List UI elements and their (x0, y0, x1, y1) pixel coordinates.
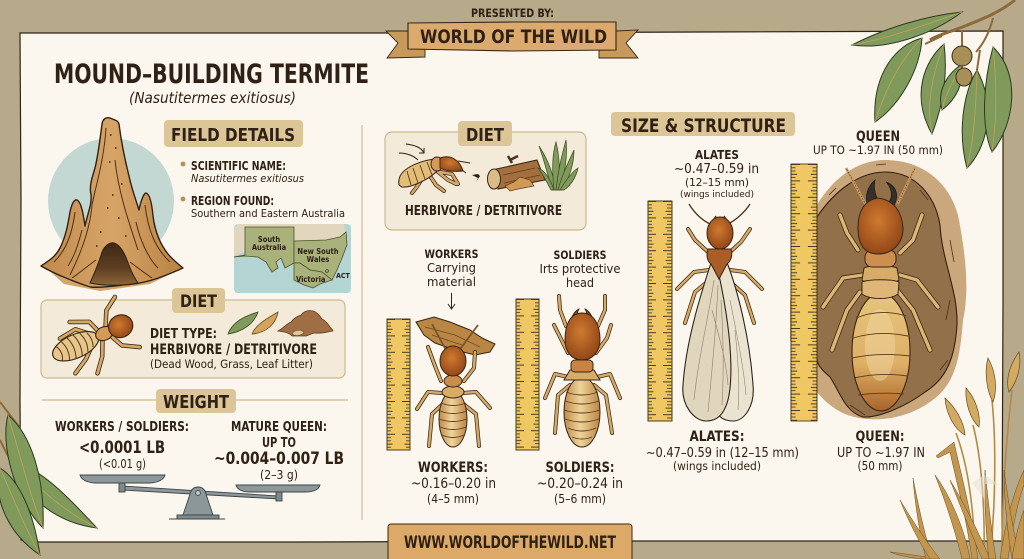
leaf b (14, 462, 97, 528)
grass stems (956, 390, 1012, 559)
illustration: burrow (790, 160, 966, 419)
banner title: WORLD OF THE WILD (420, 26, 607, 48)
illustration: soldier termite (545, 296, 620, 447)
diet heading left (172, 288, 225, 313)
alates size label: ALATES: (690, 429, 744, 445)
field details list: Southern and Eastern Australia (191, 207, 345, 220)
queen size label: (50 mm) (858, 459, 902, 473)
field details list: REGION FOUND: (191, 194, 274, 208)
workers and soldiers weight: (<0.01 g) (99, 457, 146, 471)
map of southeastern australia: New South (297, 247, 339, 256)
queen mandibles (866, 180, 897, 207)
arrow: down to worker (448, 293, 455, 309)
mound cave (90, 243, 138, 285)
map of southeastern australia: South (258, 235, 280, 244)
illustration: worker termite (416, 317, 495, 447)
foliage: grass bottom right (890, 352, 1024, 559)
ruler: soldiers (516, 299, 539, 450)
workers and soldiers weight: <0.0001 LB (79, 438, 165, 458)
weight section (42, 389, 348, 519)
queen top label: QUEEN (856, 129, 900, 145)
icon: green leaf (228, 312, 258, 334)
right wing (718, 260, 753, 421)
ruler: queen (791, 164, 817, 421)
workers size label: ~0.16–0.20 in (411, 476, 496, 492)
soldiers top label: SOLDIERS (554, 248, 606, 262)
header: presented by: PRESENTED BY: (471, 6, 554, 20)
illustration: alate termite (677, 204, 762, 421)
map of southeastern australia: ACT (336, 272, 350, 280)
leaf 3 (921, 44, 945, 134)
subtitle: (Nasutitermes exitiosus) (129, 89, 296, 107)
alates size label: ~0.47–0.59 in (12–15 mm) (646, 445, 799, 461)
leaf c (0, 468, 40, 555)
queen top label: UP TO ~1.97 IN (50 mm) (813, 143, 943, 157)
leaf 5 (962, 70, 988, 168)
diet heading center: DIET (466, 125, 504, 146)
diet heading center (458, 121, 512, 146)
leaf 1 (852, 12, 962, 46)
leaf 2 (875, 38, 922, 122)
map of southeastern australia (234, 224, 351, 293)
diet text (150, 326, 317, 371)
panel: diet left (41, 288, 345, 387)
title: MOUND–BUILDING TERMITE (54, 59, 369, 90)
ruler: workers (387, 319, 410, 450)
field details list: Nasutitermes exitiosus (191, 172, 304, 185)
icon: balance scale (80, 475, 320, 519)
ruler: alates (648, 201, 672, 421)
size and structure heading: SIZE & STRUCTURE (621, 115, 786, 137)
soldiers top label: head (566, 276, 594, 290)
foliage: eucalyptus top right (852, 0, 1015, 168)
icon: grass (538, 140, 578, 190)
workers size label: (4–5 mm) (427, 492, 479, 506)
workers top label: material (427, 275, 476, 289)
soldiers size label: (5–6 mm) (554, 492, 606, 506)
gum nuts (952, 46, 972, 66)
website banner: WWW.WORLDOFTHEWILD.NET (404, 533, 616, 553)
icon: motion arrows (399, 144, 424, 160)
alates size label (646, 429, 799, 473)
foliage: eucalyptus bottom left (0, 402, 97, 555)
icon: log (488, 156, 545, 191)
soldiers size label (537, 460, 623, 506)
diet text: HERBIVORE / DETRITIVORE (150, 342, 317, 358)
queen weight (214, 420, 344, 482)
panel: diet center (385, 121, 586, 230)
workers and soldiers weight: WORKERS / SOLDIERS: (55, 420, 189, 435)
diet heading left: DIET (180, 292, 218, 312)
workers size label: WORKERS: (418, 460, 488, 476)
website banner (388, 524, 632, 559)
queen weight: UP TO (262, 436, 296, 451)
queen weight: MATURE QUEEN: (231, 420, 327, 435)
workers top label (424, 247, 478, 289)
weight heading: WEIGHT (163, 392, 229, 413)
icon: leaf litter pile (278, 311, 333, 336)
queen size label (837, 429, 925, 473)
column divider (361, 125, 363, 520)
diet text: (Dead Wood, Grass, Leaf Litter) (150, 357, 313, 371)
queen size label: QUEEN: (856, 429, 904, 445)
icon: dry leaf (252, 312, 278, 334)
diet text: DIET TYPE: (150, 326, 217, 342)
workers and soldiers weight (55, 420, 189, 471)
queen top label (813, 129, 943, 157)
diet caption: HERBIVORE / DETRITIVORE (405, 204, 562, 219)
workers top label: Carrying (427, 261, 476, 275)
map of southeastern australia: Wales (307, 255, 329, 264)
icon: termite (41, 295, 146, 387)
field details list: SCIENTIFIC NAME: (191, 159, 286, 173)
illustration: termite mound (41, 118, 183, 291)
alates top label: (wings included) (680, 190, 754, 200)
queen size label: UP TO ~1.97 IN (837, 446, 925, 461)
field details list (181, 159, 345, 220)
workers top label: WORKERS (424, 247, 478, 261)
alates top label: ~0.47–0.59 in (674, 161, 759, 177)
soldiers top label (540, 248, 621, 290)
alates top label: ALATES (695, 148, 739, 162)
grass seed heads (986, 358, 995, 402)
queen weight: ~0.004–0.007 LB (214, 449, 344, 469)
banner (408, 22, 616, 51)
banner tail right (599, 30, 638, 58)
alates top label (674, 148, 759, 200)
banner tail left (386, 31, 425, 58)
map of southeastern australia: Australia (252, 243, 287, 252)
field details heading: FIELD DETAILS (171, 125, 295, 146)
left wing (683, 260, 731, 421)
leaf 6 (985, 47, 1012, 152)
icon: foraging termite (399, 157, 480, 193)
leaf 4 (941, 64, 962, 110)
workers size label (411, 460, 496, 506)
soldiers size label: ~0.20–0.24 in (537, 476, 623, 492)
queen weight: (2–3 g) (260, 468, 298, 482)
map of southeastern australia: Victoria (296, 275, 326, 284)
alates top label: (12–15 mm) (685, 176, 749, 189)
soldiers size label: SOLDIERS: (546, 460, 614, 476)
illustration: queen termite (823, 168, 938, 411)
leaf a (6, 415, 43, 528)
header: presented by (386, 6, 638, 58)
alates size label: (wings included) (673, 459, 761, 473)
soldiers top label: Irts protective (540, 262, 621, 276)
